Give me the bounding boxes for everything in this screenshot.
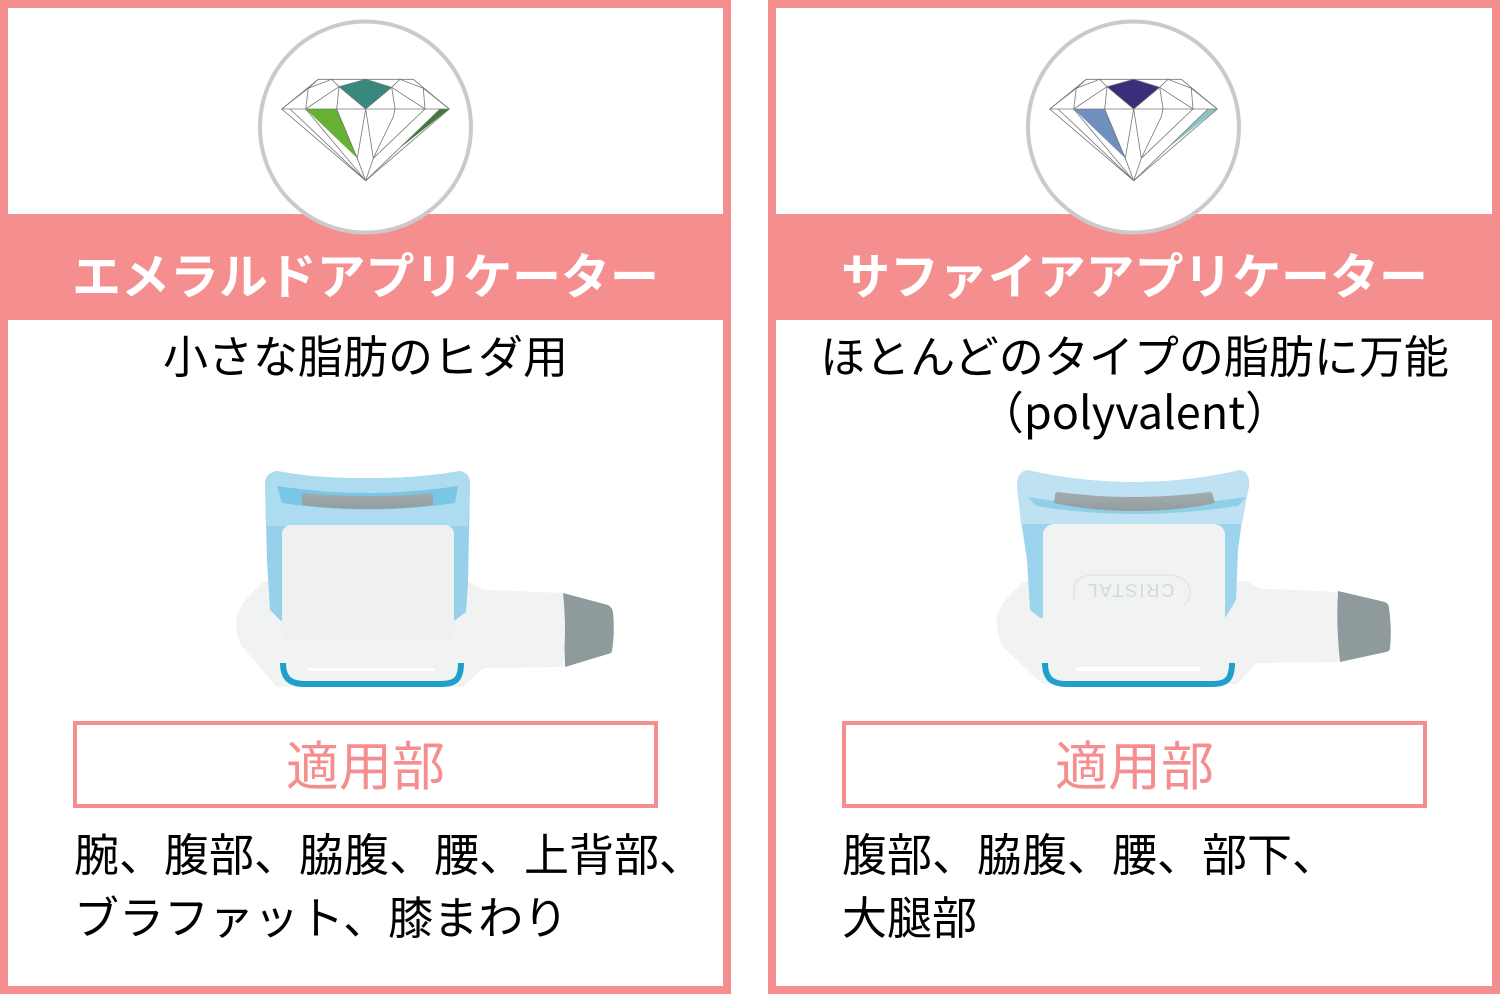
icon: sapphire diamond badge: [1028, 22, 1239, 232]
heading: sapphire applicator: サファイアアプリケーター: [841, 238, 1428, 309]
heading: emerald applicator: エメラルドアプリケーター: [72, 238, 659, 309]
blue silicone cup: [1017, 470, 1249, 618]
text: emerald treatment areas: 腕、腹部、脇腹、腰、上背部、: [74, 819, 704, 884]
label box: sapphire treatment area: [842, 721, 1427, 808]
label box: emerald treatment area: [73, 721, 658, 808]
metal plate: [1054, 492, 1215, 511]
product image: sapphire applicator: [997, 470, 1391, 684]
heading band: emerald: [0, 214, 731, 320]
white base: [997, 580, 1340, 684]
handle: [283, 663, 461, 684]
text: emerald description: 小さな脂肪のヒダ用: [163, 321, 568, 386]
embossed logo: CRISTAL: [1086, 580, 1174, 600]
heading band: sapphire: [769, 214, 1500, 320]
text: sapphire description: [820, 321, 1449, 442]
metal plate: [302, 493, 433, 509]
text: sapphire treatment areas: [842, 819, 1337, 947]
product image: emerald applicator: [236, 471, 614, 687]
handle: [1045, 663, 1232, 684]
white base: [236, 580, 565, 687]
grey nozzle: [563, 593, 614, 667]
white cover plate: [282, 525, 454, 641]
label box: emerald treatment area: 適用部: [286, 725, 445, 801]
white cover plate: [1043, 524, 1225, 631]
text: emerald treatment areas: ブラファット、膝まわり: [74, 882, 568, 947]
label box: sapphire treatment area: 適用部: [1055, 725, 1214, 801]
embossed logo: [1074, 575, 1190, 606]
icon: emerald diamond badge: [260, 22, 471, 232]
panel: sapphire applicator frame: [768, 0, 1500, 994]
text: sapphire treatment areas: 大腿部: [842, 882, 977, 947]
text: emerald treatment areas: [74, 819, 704, 947]
text: sapphire treatment areas: 腹部、脇腹、腰、部下、: [842, 819, 1337, 884]
text: sapphire description: （polyvalent）: [979, 377, 1290, 442]
grey nozzle: [1337, 591, 1391, 662]
text: sapphire description: ほとんどのタイプの脂肪に万能: [820, 321, 1449, 386]
blue silicone cup: [265, 471, 470, 621]
panel: emerald applicator frame: [0, 0, 731, 994]
